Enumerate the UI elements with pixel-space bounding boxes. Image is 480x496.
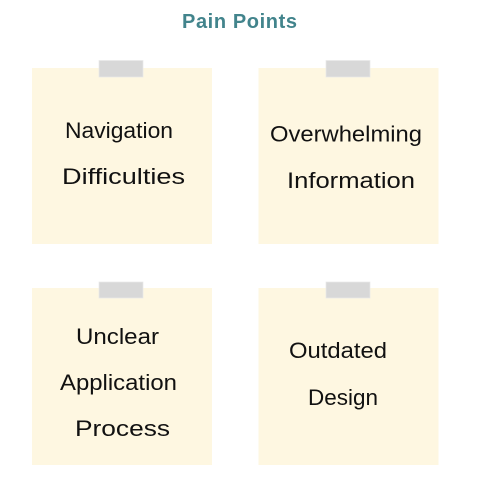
note text — [60, 324, 177, 441]
panel: unclear application process — [32, 282, 212, 465]
note text — [270, 122, 422, 193]
note text: Navigation — [65, 118, 173, 143]
note text — [62, 118, 185, 189]
icon: tape — [99, 60, 143, 77]
note text: Overwhelming — [270, 122, 422, 146]
note text: Design — [308, 385, 378, 410]
panel: overwhelming information — [258, 60, 438, 244]
note text: Unclear — [76, 324, 159, 349]
icon: tape — [326, 282, 370, 298]
panel: outdated design — [258, 282, 438, 465]
note text: Outdated — [289, 338, 387, 363]
note text: Information — [287, 168, 415, 193]
title: Pain Points — [182, 11, 297, 33]
note text: Process — [75, 416, 170, 441]
note text — [289, 338, 387, 410]
panel: navigation difficulties — [32, 60, 212, 244]
note text: Application — [60, 370, 177, 395]
icon: tape — [99, 282, 143, 298]
icon: tape — [326, 60, 370, 77]
note text: Difficulties — [62, 164, 185, 189]
